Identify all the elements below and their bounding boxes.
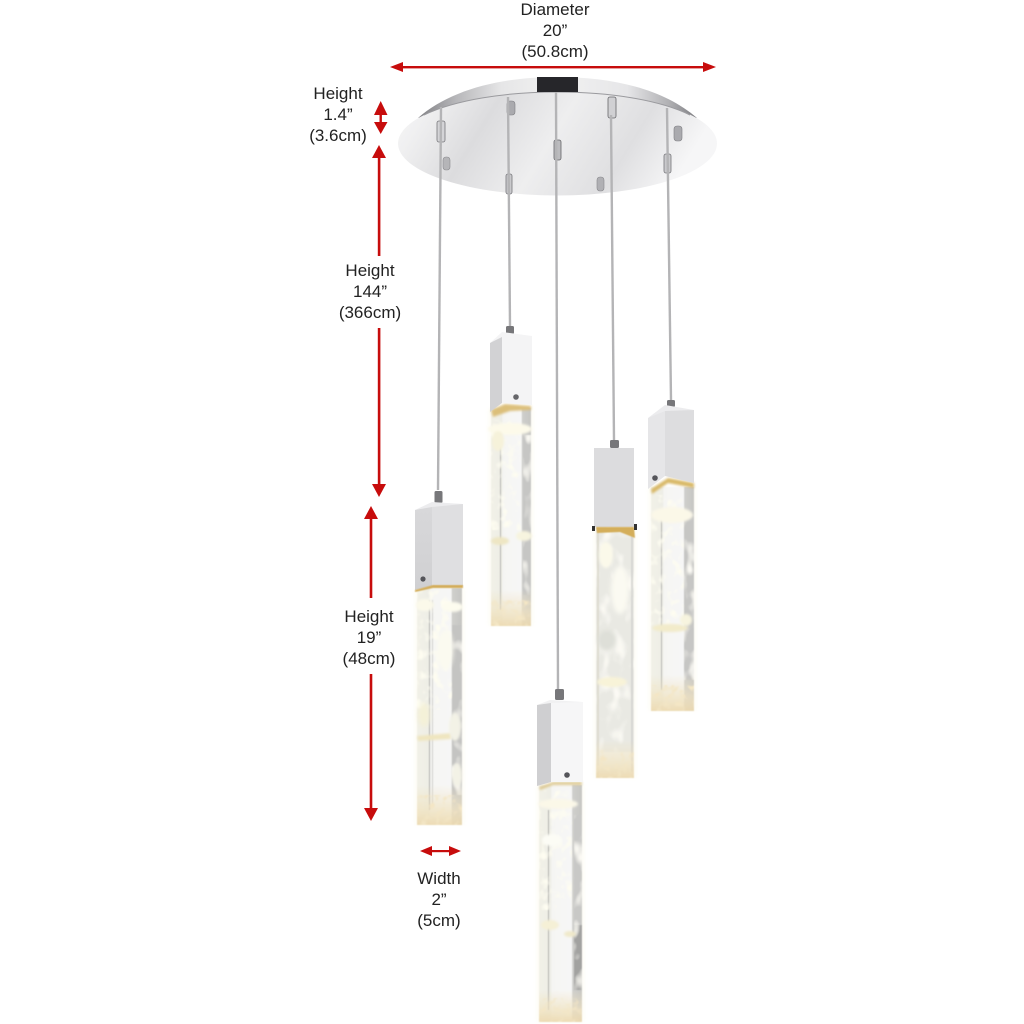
- metal housing: [592, 448, 637, 538]
- canopy mounting block: [537, 77, 578, 92]
- cord: [508, 97, 510, 326]
- arrow: pendant height: [364, 506, 378, 821]
- label: diameter: (50.8cm): [521, 42, 589, 61]
- pendant: left: [414, 107, 465, 825]
- label: canopy height: 1.4”: [323, 105, 353, 124]
- label: pendant height: [343, 607, 395, 668]
- cord: [556, 92, 558, 690]
- label: pendant height: Height: [344, 607, 394, 626]
- cord: [611, 115, 614, 440]
- metal housing: [648, 405, 694, 489]
- arrow: cord height: [372, 145, 386, 497]
- label: canopy height: Height: [313, 84, 363, 103]
- label: width: [417, 869, 461, 930]
- arrow: diameter: [390, 62, 716, 72]
- label: width: 2”: [431, 890, 447, 909]
- crystal: [648, 478, 697, 711]
- label: diameter: [521, 0, 590, 61]
- pendant: back right: [592, 115, 637, 778]
- label: cord height: Height: [345, 261, 395, 280]
- label: cord height: (366cm): [339, 303, 401, 322]
- crystal: [414, 588, 465, 825]
- canopy plate: [398, 77, 717, 196]
- label: canopy height: (3.6cm): [309, 126, 367, 145]
- label: pendant height: 19”: [357, 628, 382, 647]
- label: width: Width: [417, 869, 461, 888]
- metal housing: [490, 332, 532, 412]
- cord: [438, 107, 441, 490]
- arrow: width: [420, 846, 461, 856]
- crystal: [536, 782, 585, 1022]
- label: pendant height: (48cm): [343, 649, 395, 668]
- label: cord height: [339, 261, 401, 322]
- arrow: canopy height: [374, 101, 388, 134]
- metal housing: [537, 700, 583, 786]
- label: diameter: 20”: [543, 21, 568, 40]
- pendant: back left: [488, 97, 534, 626]
- crystal: [488, 404, 534, 626]
- cord: [667, 108, 671, 400]
- label: width: (5cm): [417, 911, 461, 930]
- label: canopy height: [309, 84, 367, 145]
- pendant: far right: [648, 108, 697, 711]
- pendant: front centre: [536, 92, 585, 1022]
- label: cord height: 144”: [353, 282, 387, 301]
- canopy screws and cord grips: [437, 97, 682, 194]
- label: diameter: Diameter: [521, 0, 590, 19]
- metal housing: [415, 502, 463, 592]
- crystal: [593, 527, 637, 778]
